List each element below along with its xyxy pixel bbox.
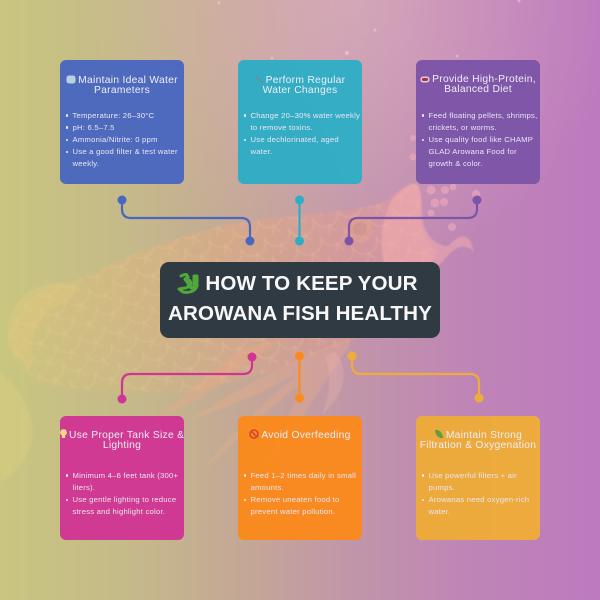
text: Use dechlorinated, aged — [250, 134, 339, 144]
text: prevent water pollution. — [250, 507, 335, 516]
bullet — [244, 114, 246, 117]
text: Use powerful filters + air — [428, 470, 517, 480]
water sparkles — [218, 0, 520, 59]
text: pumps. — [428, 483, 455, 492]
text: water. — [428, 507, 450, 516]
text: Remove uneaten food to — [250, 494, 340, 504]
text: Temperature: 26–30°C — [72, 110, 154, 120]
heading: water parameters: Parameters — [94, 85, 150, 96]
bubbles — [410, 135, 480, 231]
text — [250, 494, 340, 516]
text — [72, 147, 178, 168]
head and jaw — [382, 184, 474, 276]
panel: maintain strong filtration and oxygenation — [416, 416, 540, 540]
text: Ammonia/Nitrite: 0 ppm — [72, 134, 158, 144]
text — [428, 494, 529, 516]
text: water. — [250, 147, 272, 156]
icon: dragon — [178, 273, 198, 294]
background fish illustration — [2, 0, 542, 479]
text: liters). — [72, 483, 95, 492]
bullet — [422, 138, 424, 141]
bullet — [66, 474, 68, 477]
bullet — [244, 498, 246, 501]
heading: tank size — [60, 429, 184, 451]
text — [72, 494, 176, 516]
heading: filtration — [420, 430, 536, 451]
text: crickets, or worms. — [428, 123, 497, 132]
text: stress and highlight color. — [72, 507, 165, 516]
panel: use proper tank size and lighting — [60, 416, 184, 540]
text — [250, 134, 339, 156]
text — [250, 470, 356, 492]
text: pH: 6.5–7.5 — [72, 122, 115, 132]
heading: water changes — [256, 74, 345, 96]
heading: water changes: Perform Regular — [266, 74, 345, 86]
heading: diet: Provide High-Protein, — [432, 74, 536, 84]
panel: provide high-protein balanced diet — [416, 60, 540, 184]
text: Change 20–30% water weekly — [250, 110, 360, 120]
title line 1: HOW TO KEEP YOUR — [205, 272, 418, 295]
text: Feed 1–2 times daily in small — [250, 470, 356, 480]
heading: water parameters — [66, 74, 178, 96]
text: Use quality food like CHAMP — [428, 134, 533, 144]
heading: filtration: Filtration & Oxygenation — [420, 440, 536, 451]
title panel — [160, 262, 440, 338]
bullet — [244, 474, 246, 477]
bullet — [66, 150, 68, 153]
heading: diet: Balanced Diet — [444, 84, 512, 95]
text: Use gentle lighting to reduce — [72, 494, 176, 504]
eye — [347, 216, 373, 242]
text: GLAD Arowana Food for — [428, 147, 517, 156]
heading: tank size: Lighting — [103, 440, 141, 451]
heading: filtration: Maintain Strong — [446, 430, 522, 440]
panel: maintain ideal water parameters — [60, 60, 184, 184]
heading: water changes: Water Changes — [263, 85, 337, 96]
text: Use a good filter & test water — [72, 147, 178, 156]
text — [428, 110, 537, 132]
fins — [190, 338, 350, 472]
text: weekly. — [72, 159, 99, 168]
text: Arowanas need oxygen-rich — [428, 494, 529, 504]
heading: overfeeding: Avoid Overfeeding — [261, 430, 351, 441]
text — [250, 110, 360, 132]
dorsal fin — [7, 283, 76, 372]
fish body — [8, 183, 437, 392]
panel: avoid overfeeding — [238, 416, 362, 540]
text: to remove toxins. — [250, 123, 313, 132]
bullet — [66, 498, 68, 501]
bullet — [66, 138, 68, 141]
heading: tank size: Use Proper Tank Size & — [69, 430, 184, 440]
text: Feed floating pellets, shrimps, — [428, 110, 537, 120]
bullet — [422, 114, 424, 117]
text: Minimum 4–6 feet tank (300+ — [72, 470, 178, 480]
bullet — [422, 498, 424, 501]
bullet — [244, 138, 246, 141]
tail — [0, 372, 32, 482]
bullet — [66, 114, 68, 117]
bullet — [66, 126, 68, 129]
heading: diet — [420, 74, 536, 95]
text: growth & color. — [428, 159, 483, 168]
heading: water parameters: Maintain Ideal Water — [78, 74, 178, 86]
fish scales — [32, 196, 425, 389]
text — [72, 470, 178, 492]
text — [428, 134, 533, 168]
text — [428, 470, 517, 492]
title line 2: AROWANA FISH HEALTHY — [168, 302, 432, 325]
text: amounts. — [250, 483, 284, 492]
bullet — [422, 474, 424, 477]
panel: perform regular water changes — [238, 60, 362, 184]
fish group — [0, 170, 474, 482]
